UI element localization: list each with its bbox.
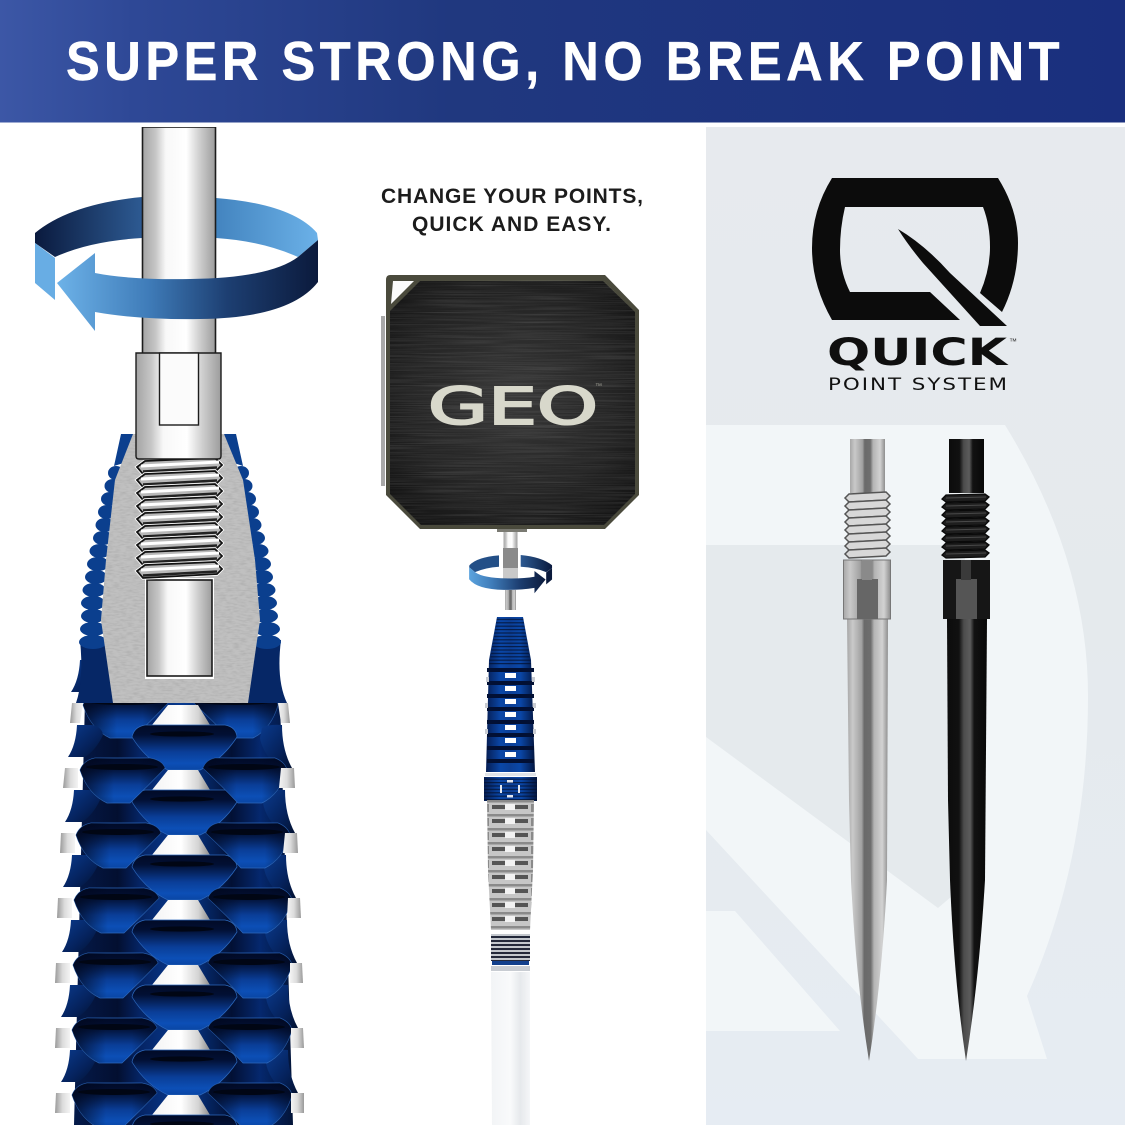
barrel body: [74, 700, 293, 1125]
dart silver grip: [487, 800, 534, 930]
dart point shaft: [142, 127, 216, 354]
panel: dart cross-section: [35, 127, 318, 1125]
barrel top ridges: [76, 434, 287, 703]
silver point: [844, 439, 890, 1061]
black tip shaft: [947, 619, 987, 1061]
small complete dart: [484, 617, 537, 1125]
silver edge tabs: [55, 703, 304, 1113]
black point: [942, 439, 990, 1061]
caption: CHANGE YOUR POINTS,: [381, 185, 643, 208]
caption: [381, 185, 643, 236]
grip rows: [61, 660, 298, 1125]
tagline: POINT SYSTEM: [828, 375, 1009, 394]
GEO logo: GEO: [428, 378, 598, 437]
black collar: [943, 560, 990, 619]
black thread: [942, 494, 989, 558]
panel: quick point system background: [706, 127, 1125, 1125]
silver collar: [844, 560, 890, 619]
caption: QUICK AND EASY.: [412, 213, 611, 236]
trademark: ™: [595, 383, 602, 390]
threaded socket: [137, 458, 222, 679]
title: SUPER STRONG, NO BREAK POINT: [66, 31, 1060, 92]
silver thread: [845, 492, 890, 558]
wordmark: QUICK: [827, 331, 1009, 374]
trademark: ™: [1009, 337, 1017, 346]
GEO point case: [381, 275, 639, 532]
silver tip shaft: [847, 619, 888, 1061]
Quick point system logo: [812, 178, 1018, 394]
black top cylinder: [949, 439, 984, 493]
dart barrel top: [486, 617, 535, 772]
dart clear stem: [491, 972, 530, 1125]
rotation arrow: [35, 127, 318, 354]
silver top cylinder: [850, 439, 885, 493]
logo mark Q: [812, 178, 1018, 320]
quick-change arrow and spindle: [469, 532, 552, 610]
header banner: [0, 0, 1125, 122]
silver cross-section: [100, 430, 265, 705]
dart rear grooves: [491, 934, 530, 961]
point collar: [136, 353, 221, 459]
dart collar ring: [485, 773, 536, 776]
